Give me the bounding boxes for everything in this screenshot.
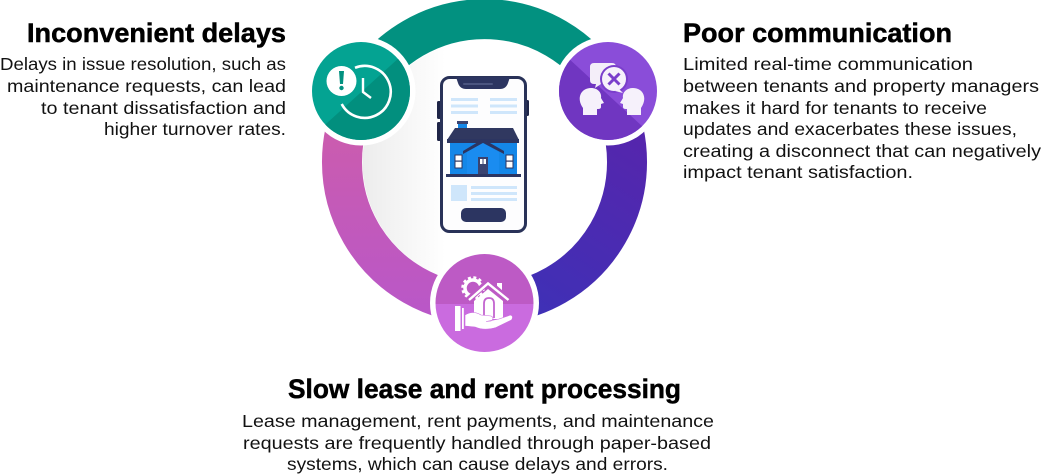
body: communication description [683, 54, 1041, 182]
body: lease description: requests are frequently handled through paper-based [243, 433, 711, 453]
body: communication description: impact tenant satisfaction. [683, 162, 913, 182]
text block: Poor communication [683, 18, 1041, 182]
body: lease description: systems, which can cause delays and errors. [287, 454, 668, 474]
text block: Slow lease and rent processing [242, 374, 714, 474]
inner disc [362, 40, 606, 284]
ring: indigo arc [484, 91, 627, 304]
body: delays description: maintenance requests, can lead [7, 76, 286, 96]
body: delays description [0, 54, 286, 139]
phone illustration [437, 77, 529, 232]
heading: Slow lease and rent processing: Slow lease and rent processing [288, 374, 681, 404]
body: communication description: updates and exacerbates these issues, [683, 119, 1017, 139]
ring: pink arc [342, 91, 484, 304]
ring: teal arc [361, 19, 608, 91]
body: communication description: creating a disconnect that can negatively [683, 141, 1041, 161]
body: communication description: makes it hard for tenants to receive [683, 98, 987, 118]
body: lease description: Lease management, rent payments, and maintenance [242, 411, 714, 431]
body: delays description: Delays in issue resolution, such as [0, 54, 286, 74]
body: lease description [242, 411, 714, 474]
body: delays description: higher turnover rates. [104, 119, 286, 139]
heading: Inconvenient delays: Inconvenient delays [27, 18, 286, 48]
icon badge: lease and rent [430, 254, 539, 352]
text block: Inconvenient delays [0, 18, 286, 139]
icon badge: communication [559, 39, 657, 146]
body: communication description: between tenants and property managers [683, 76, 1039, 96]
body: communication description: Limited real-time communication [683, 54, 973, 74]
heading: Poor communication: Poor communication [683, 18, 952, 48]
icon badge: delays clock [312, 39, 410, 146]
body: delays description: to tenant dissatisfaction and [41, 98, 286, 118]
house on phone screen [446, 121, 521, 177]
